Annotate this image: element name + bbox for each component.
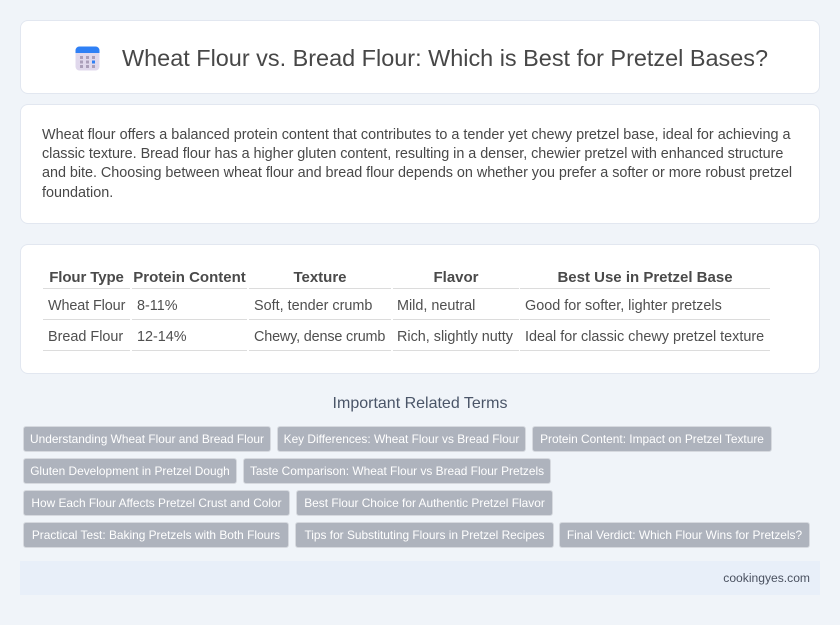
- comparison table: Soft, tender crumb: [254, 298, 372, 314]
- related term tags: Understanding Wheat Flour and Bread Flour: [30, 432, 264, 446]
- comparison table: 12-14%: [137, 329, 187, 345]
- header card: [20, 20, 820, 94]
- intro text: foundation.: [42, 185, 113, 201]
- comparison table: Bread Flour: [48, 329, 123, 345]
- comparison table: Ideal for classic chewy pretzel texture: [525, 329, 764, 345]
- heading: related terms: Important Related Terms: [333, 395, 507, 412]
- related term tags: Protein Content: Impact on Pretzel Texture: [540, 432, 764, 446]
- comparison table: 8-11%: [137, 298, 178, 314]
- footer source: cookingyes.com: [723, 571, 810, 585]
- related term tags: Key Differences: Wheat Flour vs Bread Flour: [284, 432, 519, 446]
- comparison table: [43, 269, 770, 351]
- related term tags: Taste Comparison: Wheat Flour vs Bread Flour Pretzels: [250, 464, 544, 478]
- intro text: [42, 127, 792, 201]
- related term tags: Best Flour Choice for Authentic Pretzel Flavor: [304, 496, 545, 510]
- comparison table: Chewy, dense crumb: [254, 329, 385, 345]
- related term tags: [23, 426, 810, 548]
- panel: intro paragraph: [20, 104, 820, 224]
- comparison table: Rich, slightly nutty: [397, 329, 513, 345]
- intro text: Wheat flour offers a balanced protein content that contributes to a tender yet chewy pretzel base, ideal for achieving a: [42, 127, 790, 143]
- footer: [20, 561, 820, 595]
- icon: calendar: [76, 46, 100, 70]
- comparison table: Flavor: [433, 269, 478, 286]
- comparison table: Best Use in Pretzel Base: [557, 269, 733, 286]
- comparison table: Flour Type: [49, 269, 124, 286]
- related term tags: Final Verdict: Which Flour Wins for Pretzels?: [567, 528, 802, 542]
- comparison table: Protein Content: [133, 269, 246, 286]
- intro text: classic texture. Bread flour has a higher gluten content, resulting in a denser, chewier pretzel with enhanced structure: [42, 146, 783, 162]
- related term tags: Practical Test: Baking Pretzels with Both Flours: [32, 528, 280, 542]
- related term tags: Gluten Development in Pretzel Dough: [30, 464, 230, 478]
- panel: comparison table: [20, 244, 820, 374]
- related term tags: How Each Flour Affects Pretzel Crust and Color: [31, 496, 282, 510]
- comparison table: Texture: [293, 269, 347, 286]
- related term tags: Tips for Substituting Flours in Pretzel Recipes: [304, 528, 545, 542]
- comparison table: Mild, neutral: [397, 298, 475, 314]
- comparison table: Good for softer, lighter pretzels: [525, 298, 722, 314]
- comparison table: Wheat Flour: [48, 298, 125, 314]
- title: Wheat Flour vs. Bread Flour: Which is Best for Pretzel Bases?: [122, 45, 768, 71]
- intro text: and bite. Choosing between wheat flour and bread flour depends on whether you prefer a softer or more robust pretzel: [42, 165, 792, 181]
